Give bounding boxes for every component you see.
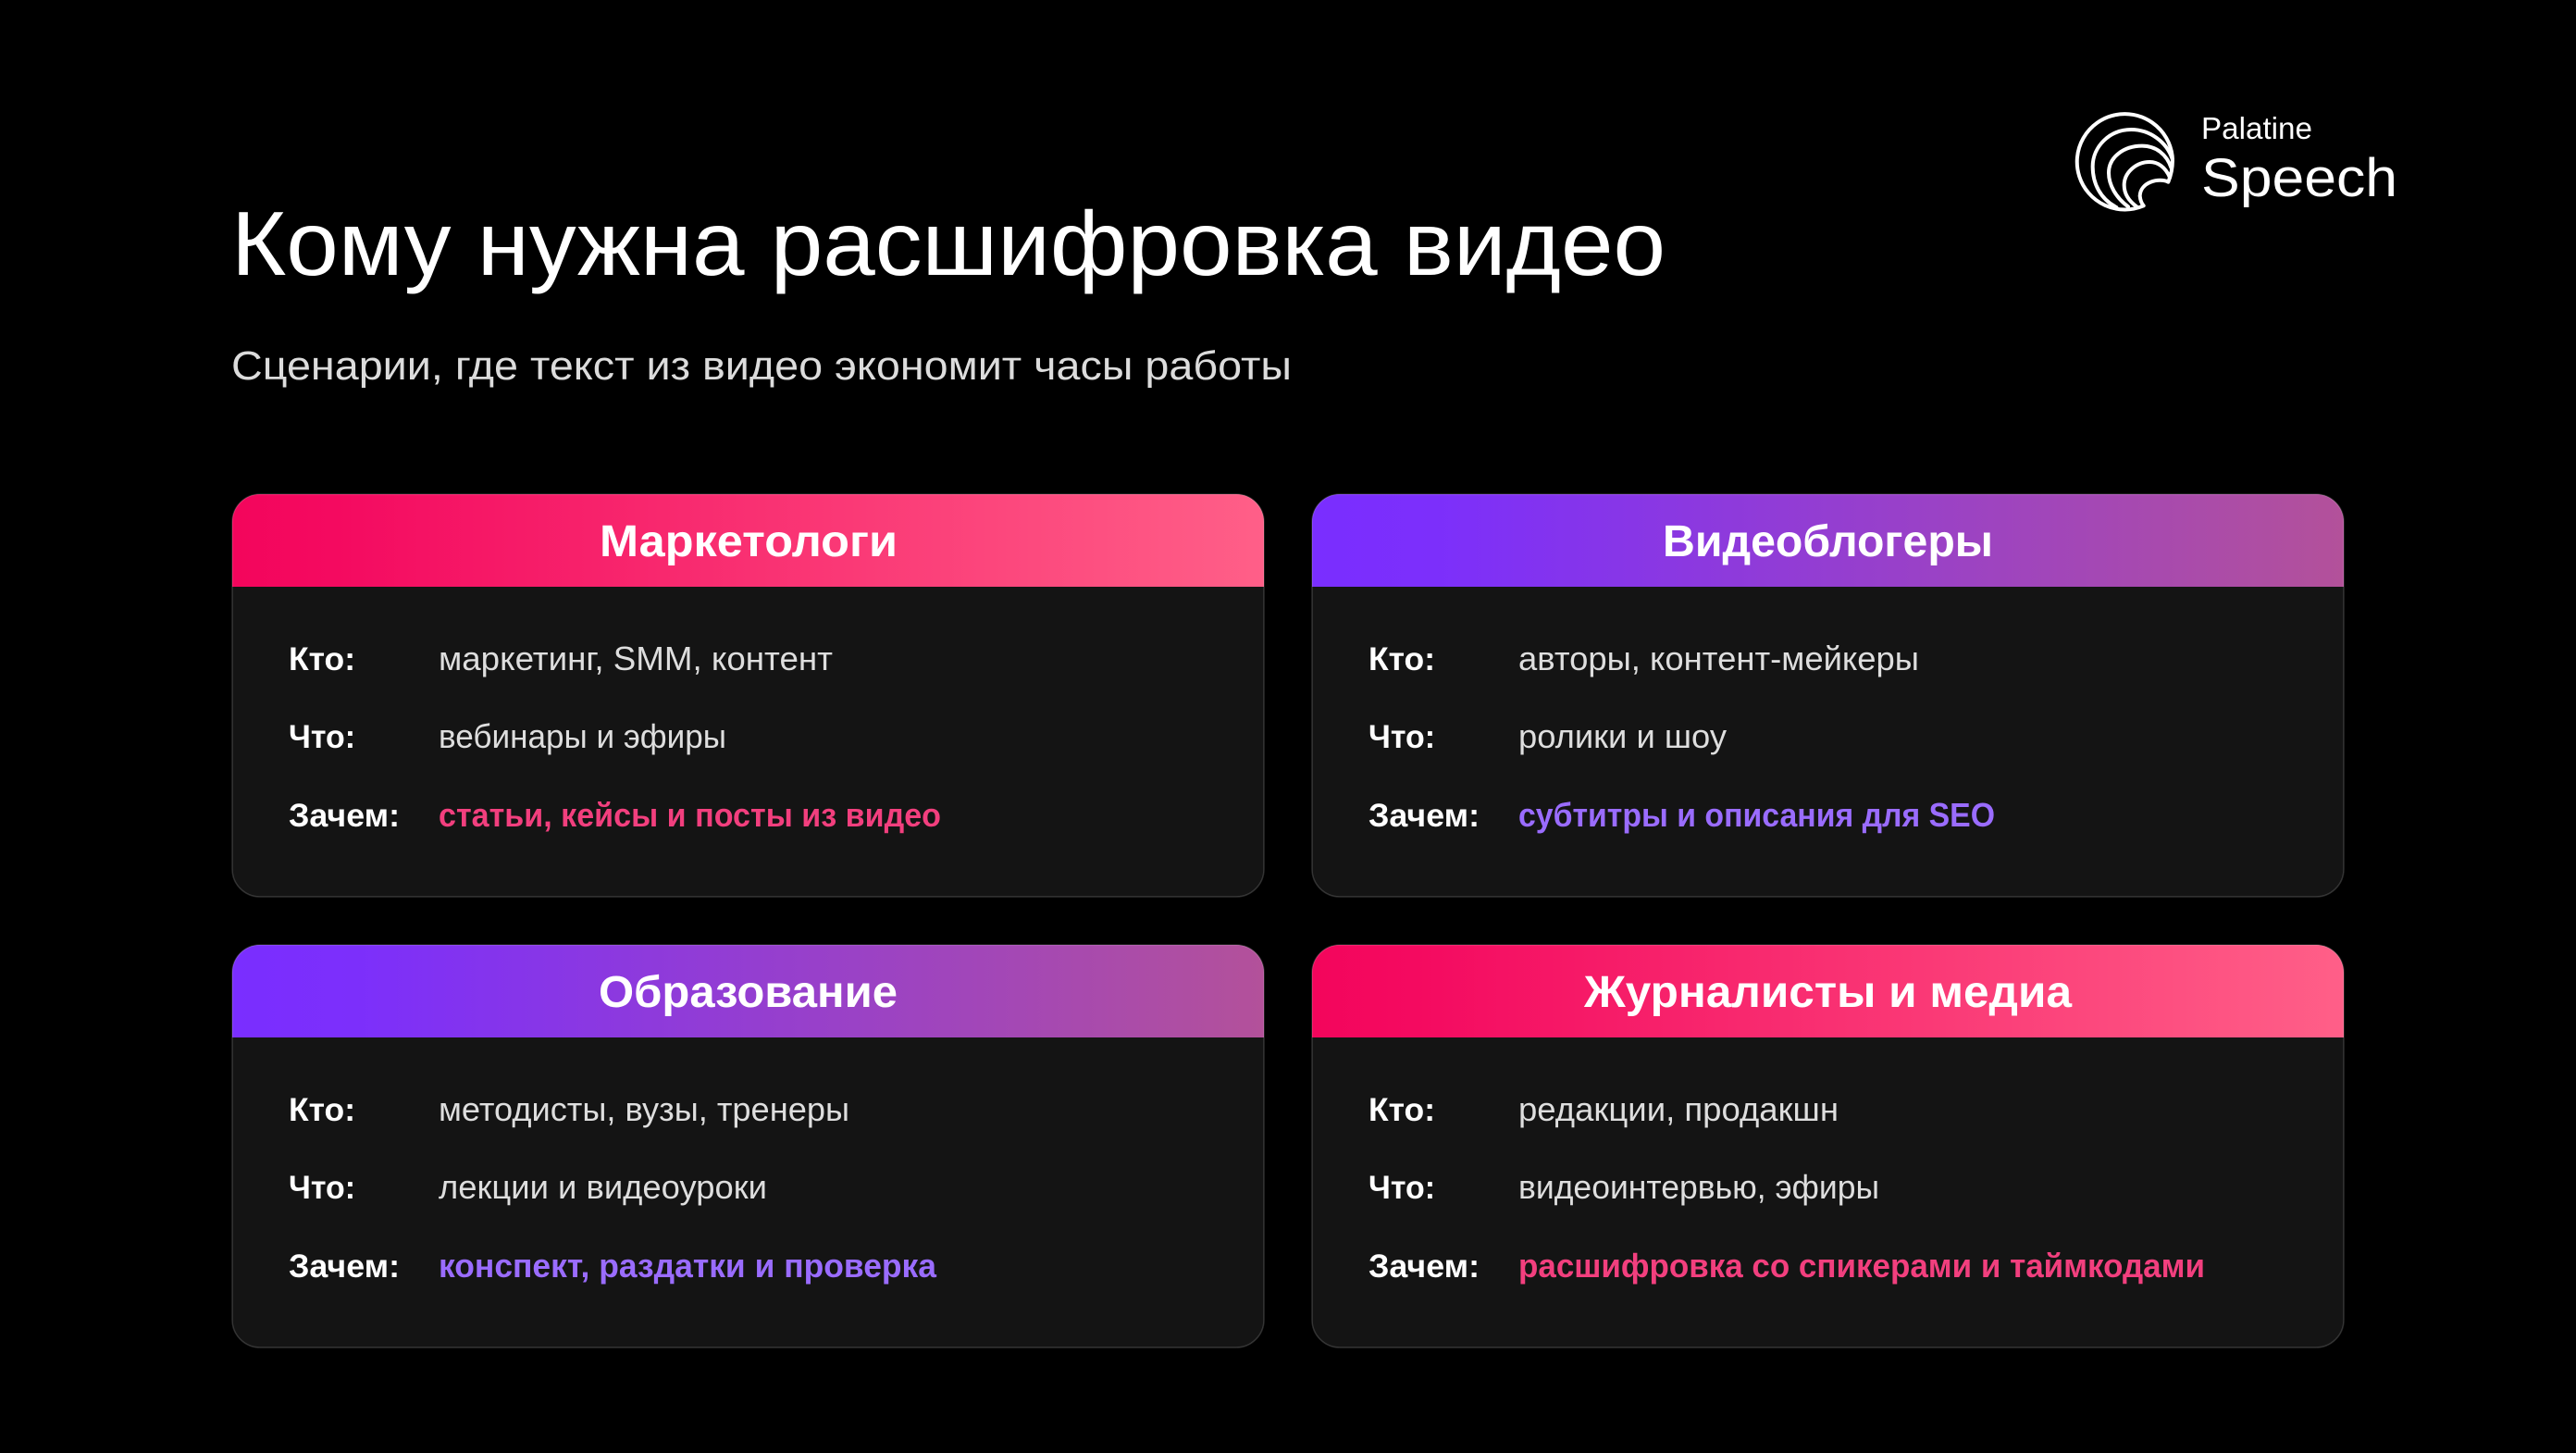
row: Что [1368,1168,1879,1206]
row: Что: Что: [289,1170,355,1206]
row: Что [289,1168,767,1206]
panel: Видеоблогеры [1312,494,2344,897]
panel header: Маркетологи [232,494,1264,587]
panel header: Маркетологи: Маркетологи [600,517,898,566]
logo: Palatine Speech [2077,111,2397,209]
row: Зачем: субтитры и описания для SEO [1518,796,1995,834]
panel: Маркетологи [232,494,1264,897]
row: Что: вебинары и эфиры [439,717,726,755]
row: Что: Что: [1368,1170,1435,1206]
logo text: Speech: Speech [2201,148,2397,208]
icon: shell logo mark [2077,114,2173,209]
row: Что [1368,717,1727,755]
card outline [1312,945,2344,1347]
row: Зачем: расшифровка со спикерами и таймкодами [1518,1247,2205,1285]
panel: Образование [232,945,1264,1347]
card outline [232,494,1264,897]
logo text: Palatine: Palatine [2201,111,2312,145]
row: Что: Что: [1368,719,1435,755]
panel header: Видеоблогеры: Видеоблогеры [1663,517,1993,566]
row: Кто: авторы, контент-мейкеры [1518,640,1919,677]
panel: Журналисты и медиа [1312,945,2344,1347]
row: Зачем: Зачем: [289,1248,400,1285]
panel header: Образование: Образование [599,968,898,1017]
row: Зачем: Зачем: [1368,1248,1480,1285]
row: Кто: Кто: [1368,1092,1435,1128]
subtitle: Сценарии, где текст из видео экономит часы работы [231,343,1292,389]
title: Кому нужна расшифровка видео [231,192,1666,294]
row: Что: Что: [289,719,355,755]
row: Зачем: Зачем: [1368,798,1480,834]
row: Кто [1368,1090,1839,1128]
panel header: Журналисты и медиа: Журналисты и медиа [1583,968,2072,1017]
row: Кто: методисты, вузы, тренеры [439,1090,849,1128]
panel header: Журналисты и медиа [1312,945,2344,1037]
card outline [1312,494,2344,897]
row: Что: лекции и видеоуроки [439,1168,767,1206]
row: Кто: Кто: [289,641,355,677]
row: Что: ролики и шоу [1518,717,1727,755]
row: Зачем: Зачем: [289,798,400,834]
row: Зачем: статьи, кейсы и посты из видео [439,796,941,834]
row: Кто: маркетинг, SMM, контент [439,640,833,677]
row: Кто: редакции, продакшн [1518,1090,1839,1128]
row: Кто: Кто: [1368,641,1435,677]
row: Что: видеоинтервью, эфиры [1518,1168,1879,1206]
panel header: Видеоблогеры [1312,494,2344,587]
row: Кто: Кто: [289,1092,355,1128]
card outline [232,945,1264,1347]
row: Зачем: конспект, раздатки и проверка [439,1247,937,1285]
row: Что [289,717,726,755]
panel header: Образование [232,945,1264,1037]
